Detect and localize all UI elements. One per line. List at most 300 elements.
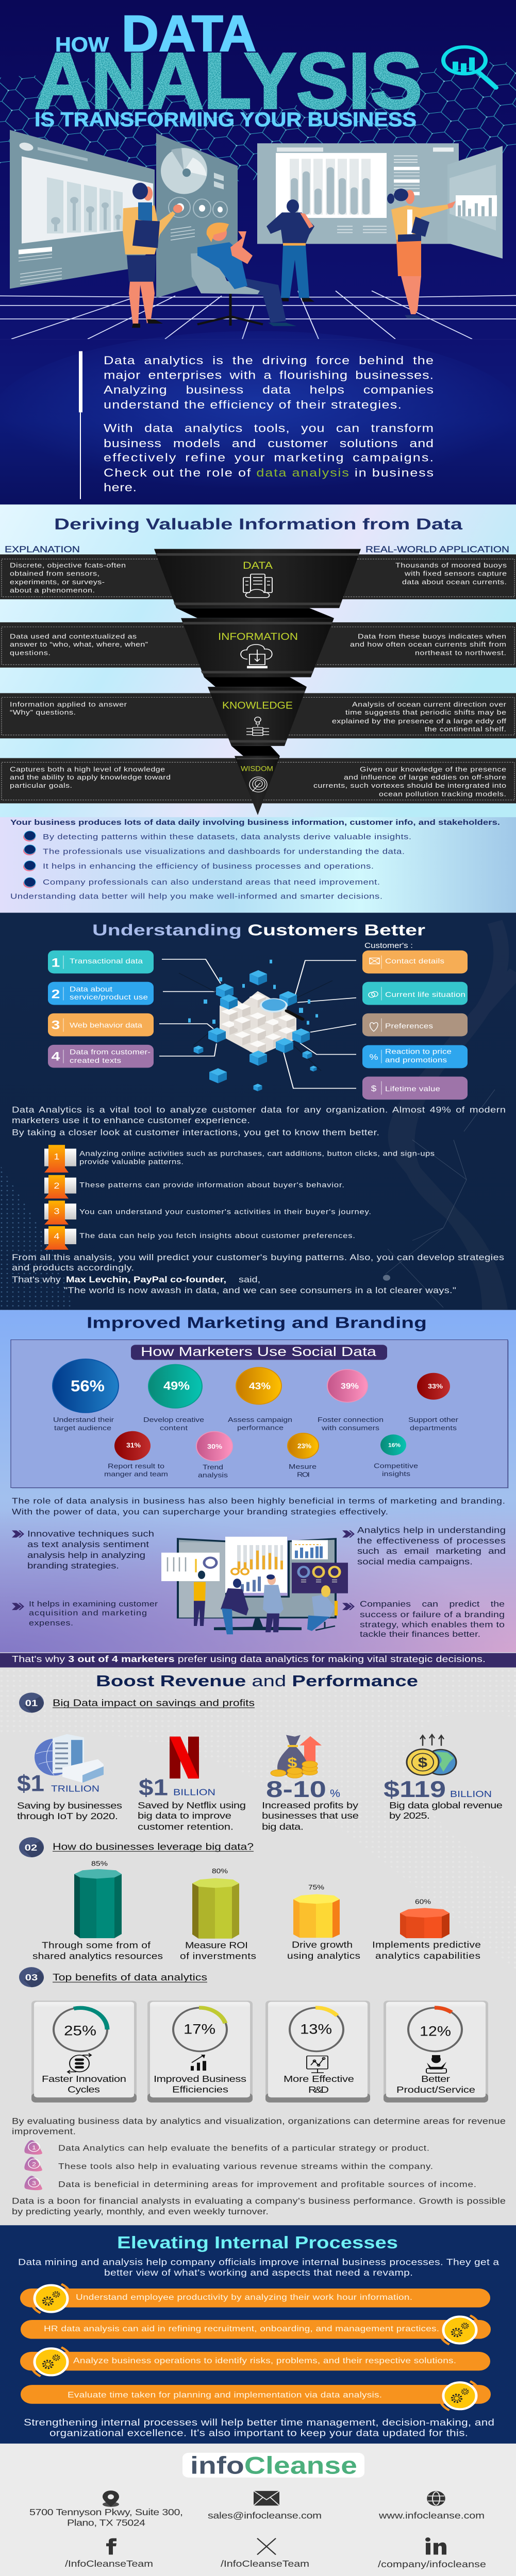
stat: 1 billion bbox=[138, 1774, 246, 1832]
band texts right: Analysis of ocean current direction over bbox=[352, 701, 506, 708]
circle labels row two: ROI bbox=[297, 1471, 310, 1479]
panel: boost revenue and performance bbox=[0, 1668, 516, 2225]
right customer pills: Lifetime value bbox=[385, 1086, 440, 1093]
bar 85 percent: 85% bbox=[91, 1860, 108, 1868]
paragraph two bbox=[104, 422, 434, 494]
band texts left: and the ability to apply knowledge toward bbox=[10, 774, 171, 782]
heading: Improved Marketing and Branding bbox=[87, 1314, 427, 1332]
icon: money bag with arrow and coins bbox=[271, 1735, 322, 1778]
column headings: EXPLANATION bbox=[5, 545, 80, 555]
band texts left: Captures both a high level of knowledge bbox=[10, 766, 165, 773]
icon: magnifier with bars bbox=[443, 47, 496, 88]
paragraph one: understand the efficiency of their strategies. bbox=[104, 399, 402, 411]
band texts left: particular goals. bbox=[10, 782, 72, 790]
illustration: team at dashboard monitor bbox=[161, 1537, 348, 1634]
circle labels row one: with consumers bbox=[321, 1425, 379, 1432]
bullet: companies predict bbox=[342, 1599, 505, 1639]
step texts: Analyzing online activities such as purchases, cart additions, button clicks, and sign-ups bbox=[79, 1150, 435, 1158]
band texts left: Data used and contextualized as bbox=[10, 633, 137, 640]
card: better product/service bbox=[384, 2001, 488, 2103]
process pill 1 bbox=[20, 2276, 490, 2321]
quote paragraph: and products accordingly. bbox=[12, 1263, 134, 1273]
left data pills: Transactional data bbox=[70, 957, 143, 965]
connector lines bbox=[159, 959, 356, 1088]
right customer pills bbox=[362, 951, 468, 1099]
band texts right: time suggests that periodic shifts may be bbox=[345, 709, 506, 716]
bullet: customer acquisition: expenses. bbox=[29, 1619, 73, 1628]
band texts right: and how often ocean currents shift from bbox=[350, 641, 506, 649]
accent bar bbox=[79, 351, 82, 499]
intro paragraph bbox=[18, 2258, 499, 2278]
bar 75 percent: 75% bbox=[308, 1884, 324, 1891]
handle: linkedin: /company/infocleanse bbox=[378, 2560, 486, 2569]
card: faster innovation cycles bbox=[31, 2001, 137, 2103]
quote paragraph: From all this analysis, you will predict your customer's buying patterns. Also, you can develop strategies bbox=[12, 1253, 504, 1262]
circle labels row two: Competitive bbox=[374, 1463, 418, 1470]
title: IS TRANSFORMING YOUR BUSINESS bbox=[35, 108, 417, 131]
band texts left: answer to “who, what, where, when” bbox=[10, 641, 148, 649]
circles row two: 16% bbox=[388, 1442, 401, 1448]
stat: 8-10 percent bbox=[262, 1776, 359, 1832]
bullet: innovative techniques: as text analysis sentiment bbox=[27, 1539, 149, 1549]
right customer pills: % bbox=[370, 1053, 378, 1062]
logo: infoCleanse bbox=[190, 2452, 357, 2479]
closing paragraph: organizational excellence. It's also important to keep your data updated for this. bbox=[49, 2428, 468, 2438]
icon: growth bars bbox=[191, 2055, 206, 2071]
bullet: customer acquisition: It helps in examining customer bbox=[29, 1600, 158, 1608]
quote paragraph: Max Levchin, PayPal co-founder, bbox=[66, 1275, 226, 1284]
icon: globe bbox=[428, 2492, 444, 2505]
stat: 119 billion: by 2025. bbox=[389, 1811, 430, 1821]
handle: x: /InfoCleanseTeam bbox=[221, 2559, 309, 2569]
intro paragraph: Data mining and analysis help company officials improve internal business processes. They get a bbox=[18, 2258, 499, 2267]
bar chart: leverage big data bbox=[74, 1860, 450, 1939]
step texts: The data can help you fetch insights about customer preferences. bbox=[79, 1232, 355, 1240]
icon: x bbox=[257, 2538, 276, 2555]
funnel labels: INFORMATION bbox=[218, 631, 298, 642]
person: standing man thinking bbox=[267, 199, 314, 302]
bar labels bbox=[32, 1940, 481, 1961]
closing paragraph: by predicting yearly, monthly, and even weekly turnover. bbox=[12, 2207, 269, 2216]
bullet: analytics help: social media campaigns. bbox=[357, 1556, 473, 1566]
left data pills: Web behavior data bbox=[70, 1022, 142, 1029]
card: faster innovation cycles: Cycles bbox=[68, 2084, 100, 2095]
closing paragraph bbox=[12, 2196, 506, 2216]
bullet list: By detecting patterns within these datasets, data analysts derive valuable insights. bbox=[43, 833, 411, 841]
paragraph two: business models and customer solutions and bbox=[104, 437, 434, 450]
stat: 8-10 percent: businesses that use bbox=[262, 1811, 359, 1821]
paragraph bbox=[12, 2116, 506, 2136]
panel: header hero bbox=[0, 0, 516, 339]
person: woman with folder bbox=[123, 183, 182, 328]
circles row one: 43% bbox=[249, 1381, 271, 1392]
intro paragraph: better view of what's working and aspects that need a revamp. bbox=[104, 2268, 413, 2278]
stat: 1 billion: Saved by Netflix using bbox=[138, 1801, 246, 1810]
bullet: companies predict: tackle their finances better. bbox=[360, 1630, 480, 1639]
paragraph: The role of data analysis in business has also been highly beneficial in terms of marketing and branding. bbox=[12, 1496, 505, 1505]
circle labels row one: content bbox=[160, 1425, 188, 1432]
closing line: Understanding data better will help you make well-informed and smarter decisions. bbox=[10, 892, 382, 901]
funnel labels: DATA bbox=[243, 560, 273, 571]
right customer pills: Reaction to price bbox=[385, 1048, 452, 1056]
band texts right: with fixed sensors capture bbox=[404, 570, 507, 578]
center-left dashboard panel bbox=[156, 133, 238, 298]
pink numbered list: Data Analytics can help evaluate the benefits of a particular strategy or product. bbox=[58, 2143, 429, 2153]
bar 85 percent bbox=[74, 1860, 122, 1938]
band texts left: questions. bbox=[10, 650, 51, 657]
card: more effective R&D: R&D bbox=[308, 2085, 329, 2095]
circle labels row one bbox=[53, 1416, 458, 1432]
stat: 1 trillion: through IoT by 2020. bbox=[17, 1811, 118, 1821]
stat: 8-10 percent: Increased profits by bbox=[262, 1801, 358, 1810]
numbered step icons: 3 bbox=[54, 1207, 60, 1216]
band texts right: and influence of large eddies on off-shore bbox=[344, 774, 506, 782]
closing paragraph: Data is a boon for financial analysts in evaluating a company's business performance. Growth is possible bbox=[12, 2196, 506, 2206]
person: woman pointing at chart bbox=[387, 189, 456, 318]
paragraph two: here. bbox=[104, 482, 137, 494]
left data pills: service/product use bbox=[70, 993, 148, 1002]
stat: 8-10 percent: 8-10 bbox=[266, 1776, 326, 1802]
stat: 8-10 percent: big data. bbox=[262, 1822, 304, 1832]
bullet: companies predict: success or failure of a branding bbox=[360, 1610, 505, 1619]
heading: Elevating Internal Processes bbox=[117, 2233, 398, 2252]
circles row one: 39% bbox=[341, 1381, 359, 1391]
circles row two: 31% bbox=[126, 1442, 141, 1449]
bar labels: Drive growth bbox=[292, 1940, 353, 1950]
paragraph bbox=[12, 1496, 505, 1516]
section badge 02: 02 bbox=[25, 1843, 37, 1853]
decorative background pattern bbox=[0, 1668, 516, 1970]
process pill 3 bbox=[20, 2339, 490, 2385]
panel: improved marketing and branding bbox=[0, 1310, 516, 1668]
left data pills: Data from customer- bbox=[70, 1048, 151, 1056]
bar labels: using analytics bbox=[287, 1952, 360, 1961]
step texts: These patterns can provide information about buyer's behavior. bbox=[79, 1181, 344, 1189]
stat: 119 billion: BILLION bbox=[450, 1789, 492, 1799]
card: better product/service: 12% bbox=[420, 2024, 451, 2039]
bullet list: The professionals use visualizations and dashboards for understanding the data. bbox=[43, 847, 405, 856]
quote paragraph: That's why bbox=[12, 1275, 61, 1284]
stat: 119 billion: $119 bbox=[384, 1776, 446, 1802]
card: improved business efficiencies: 17% bbox=[184, 2022, 215, 2037]
bar 60 percent: 60% bbox=[415, 1899, 431, 1906]
band texts right: ocean pollution tracking models. bbox=[379, 791, 506, 798]
circle labels row one: Assess campaign bbox=[228, 1416, 292, 1423]
paragraph two: With data analytics tools, you can transform bbox=[104, 422, 434, 435]
card: improved business efficiencies bbox=[147, 2001, 253, 2103]
column headings bbox=[5, 545, 509, 555]
paragraph: improvement. bbox=[12, 2127, 76, 2136]
summary lead: Your business produces lots of data daily involving business information, customer info, and stakeholders. bbox=[10, 818, 500, 826]
stat: 1 trillion: $1 bbox=[17, 1770, 44, 1796]
paragraph one bbox=[104, 354, 434, 411]
bullet: innovative techniques: analysis help in analyzing bbox=[27, 1550, 145, 1560]
process pill 2 bbox=[21, 2307, 491, 2353]
bullet: companies predict: Companies can predict the bbox=[360, 1599, 505, 1608]
bar labels: Through some from of bbox=[42, 1941, 151, 1951]
bullet: innovative techniques: branding strategies. bbox=[27, 1561, 119, 1570]
band texts right: Thousands of moored buoys bbox=[395, 562, 507, 569]
circles row one: 56% bbox=[71, 1378, 105, 1395]
band texts left: about a phenomenon. bbox=[10, 587, 95, 595]
numbered step icons bbox=[44, 1145, 76, 1250]
icon: location bbox=[103, 2490, 119, 2507]
paragraph: By taking a closer look at customer interactions, you get to know them better. bbox=[12, 1128, 379, 1137]
bullet list: Company professionals can also understand areas that need improvement. bbox=[43, 878, 380, 887]
icon: mail bbox=[254, 2491, 279, 2505]
left data pills: 2 bbox=[52, 987, 60, 1001]
step texts: You can understand your customer's activities in their buyer's journey. bbox=[79, 1208, 371, 1216]
step texts: provide valuable patterns. bbox=[79, 1158, 184, 1166]
circle labels row one: Foster connection bbox=[318, 1416, 384, 1423]
icon: building and globe bbox=[35, 1734, 104, 1783]
right customer pills: Current life situation bbox=[385, 991, 465, 999]
panel: understanding customers better bbox=[0, 913, 516, 1310]
section badge 01: 01 bbox=[25, 1698, 38, 1708]
bar labels: of inverstments bbox=[180, 1952, 256, 1961]
customer label: Customer's : bbox=[364, 941, 413, 950]
icon: coin, globe and arrows bbox=[407, 1735, 456, 1775]
subheading 02: How do businesses leverage big data? bbox=[53, 1841, 254, 1852]
pill heading: How Marketers Use Social Data bbox=[141, 1344, 376, 1359]
card: better product/service: Better bbox=[421, 2074, 450, 2084]
far right dashboard panel bbox=[447, 146, 503, 259]
bullet: innovative techniques bbox=[12, 1529, 154, 1570]
band texts right bbox=[313, 562, 507, 798]
circles row one bbox=[53, 1359, 450, 1413]
bullet list: It helps in enhancing the efficiency of business processes and operations. bbox=[43, 862, 374, 871]
process pill 2: HR data analysis can aid in refining recruitment, onboarding, and management practices. bbox=[44, 2324, 439, 2333]
band texts right: currents, such vortexes should be intergrated into bbox=[313, 782, 506, 790]
panel: social data bbox=[11, 1340, 509, 1488]
panel: deriving valuable information bbox=[0, 504, 516, 913]
bullet: customer acquisition: acquisition and marketing bbox=[29, 1609, 147, 1617]
process pill 4: Evaluate time taken for planning and implementation via data analysis. bbox=[68, 2390, 382, 2399]
card: faster innovation cycles: 25% bbox=[64, 2024, 96, 2039]
band texts left: Information applied to answer bbox=[10, 701, 127, 708]
circles row two: 30% bbox=[207, 1443, 222, 1451]
left data pills: 1 bbox=[52, 955, 60, 970]
icon: money bag with arrow and coins: $ bbox=[288, 1755, 297, 1771]
heading: Deriving Valuable Information from Data bbox=[54, 516, 463, 533]
bar 60 percent bbox=[400, 1899, 450, 1938]
left data pills: created texts bbox=[70, 1057, 121, 1064]
email: sales@infocleanse.com bbox=[208, 2511, 322, 2521]
band texts left bbox=[10, 562, 171, 790]
quote paragraph bbox=[12, 1253, 504, 1295]
bar labels: analytics capabilities bbox=[375, 1952, 480, 1961]
band texts right: data about ocean currents. bbox=[402, 579, 507, 586]
icon: service person bbox=[426, 2055, 446, 2073]
circles row two: 23% bbox=[297, 1443, 311, 1450]
icon: coin, globe and arrows: $ bbox=[418, 1755, 427, 1770]
right customer pills: $ bbox=[371, 1084, 377, 1093]
band texts right: northeast to northwest. bbox=[415, 650, 506, 657]
section badge 02 bbox=[19, 1837, 44, 1857]
pink numbered list: 3 bbox=[32, 2179, 36, 2187]
bullet: companies predict: strategy, which enables them to bbox=[360, 1620, 505, 1629]
floor grid bbox=[0, 291, 516, 339]
subheading 03: Top benefits of data analytics bbox=[53, 1972, 207, 1983]
icon: information cloud and laptop bbox=[241, 645, 272, 668]
icon: linkedin bbox=[425, 2537, 446, 2555]
panel: intro text bbox=[0, 331, 516, 507]
bullet: analytics help bbox=[342, 1525, 506, 1566]
band texts right: Data from these buoys indicates when bbox=[358, 633, 506, 640]
address: Plano, TX 75024 bbox=[67, 2518, 145, 2528]
card: improved business efficiencies: Improved Business bbox=[154, 2074, 246, 2084]
section badge 03: 03 bbox=[25, 1973, 38, 1983]
card: improved business efficiencies: Efficiencies bbox=[172, 2084, 228, 2095]
band texts right: the continental shelf. bbox=[425, 726, 506, 733]
stat: 119 billion bbox=[384, 1776, 503, 1821]
circle labels row two: analysis bbox=[198, 1472, 228, 1479]
website: www.infocleanse.com bbox=[378, 2511, 485, 2521]
quote paragraph: "The world is now awash in data, and we can see consumers in a lot clearer ways." bbox=[64, 1286, 456, 1295]
bullet: customer acquisition bbox=[12, 1600, 158, 1628]
bullet: analytics help: Analytics help in understanding bbox=[357, 1525, 506, 1535]
stat: 1 billion: $1 bbox=[139, 1774, 168, 1800]
paragraph one: Analyzing business data helps companies bbox=[104, 384, 434, 396]
paragraph one: Data analytics is the driving force behind the bbox=[104, 354, 434, 367]
card: more effective R&D: More Effective bbox=[284, 2074, 354, 2084]
bullet: analytics help: such as email marketing and bbox=[357, 1546, 506, 1556]
icon: netflix N bbox=[170, 1737, 199, 1778]
funnel labels bbox=[218, 560, 298, 773]
numbered step icons: 1 bbox=[54, 1152, 60, 1161]
icon: chart monitor bbox=[307, 2056, 328, 2073]
stat: 1 billion: BILLION bbox=[173, 1787, 215, 1798]
band texts left: experiments, or surveys- bbox=[10, 579, 105, 586]
right customer pills: Preferences bbox=[385, 1022, 433, 1030]
left data pills: 3 bbox=[52, 1018, 60, 1032]
quote paragraph: said, bbox=[239, 1275, 260, 1284]
bar 75 percent bbox=[293, 1884, 340, 1938]
paragraph two: Check out the role of data analysis in business bbox=[104, 467, 434, 479]
pink numbered list bbox=[24, 2140, 476, 2190]
circle labels row one: Understand their bbox=[53, 1416, 114, 1423]
paragraph bbox=[12, 1105, 506, 1137]
pink numbered list: These tools also help in evaluating various revenue streams within the company. bbox=[58, 2162, 433, 2171]
circle labels row two: Report result to bbox=[108, 1463, 164, 1470]
stat: 1 billion: customer retention. bbox=[138, 1822, 234, 1832]
stat: 8-10 percent: % bbox=[330, 1788, 340, 1800]
band texts left: Discrete, objective fcats-often bbox=[10, 562, 126, 569]
title: HOW bbox=[55, 33, 109, 56]
central data cube bbox=[179, 960, 332, 1091]
stat: 119 billion: Big data global revenue bbox=[389, 1801, 503, 1810]
banner: 3 out of 4 marketers: That's why 3 out of 4 marketers prefer using data analytics for making vital strategic decisions. bbox=[12, 1654, 486, 1664]
band texts right: explained by the presence of a large eddy off bbox=[332, 718, 507, 725]
funnel bbox=[154, 549, 361, 815]
paragraph one: major enterprises with a flourishing businesses. bbox=[104, 369, 434, 382]
circles row two bbox=[114, 1431, 406, 1461]
bar 80 percent: 80% bbox=[212, 1868, 228, 1875]
pink numbered list: 2 bbox=[32, 2161, 36, 2167]
heading: Understanding Customers Better bbox=[92, 922, 425, 939]
person: seated man on chair bbox=[191, 223, 296, 326]
panel: elevating internal processes bbox=[0, 2225, 516, 2444]
title: ANALYSIS bbox=[35, 37, 422, 125]
dark bands bbox=[0, 554, 516, 803]
paragraph: Data Analytics is a vital tool to analyze customer data for any organization. Almost 49% of modern bbox=[12, 1105, 506, 1114]
bullet: analytics help: the effectiveness of processes bbox=[357, 1536, 506, 1545]
circles row one: 33% bbox=[428, 1383, 443, 1390]
bar labels: Measure ROI bbox=[185, 1941, 248, 1951]
circle labels row two: Trend bbox=[203, 1464, 223, 1471]
circle labels row two: Mesure bbox=[289, 1463, 317, 1471]
bullet: innovative techniques: Innovative techniques such bbox=[27, 1529, 154, 1538]
circle labels row one: performance bbox=[237, 1425, 284, 1432]
circle labels row one: Develop creative bbox=[143, 1416, 204, 1423]
band texts left: obtained from sensors, bbox=[10, 570, 99, 578]
paragraph: marketers use it to enhance customer experience. bbox=[12, 1116, 250, 1125]
stat: 1 trillion: TRILLION bbox=[51, 1784, 99, 1794]
left data pills: 4 bbox=[52, 1049, 60, 1063]
step texts bbox=[79, 1150, 435, 1240]
numbered step icons: 4 bbox=[54, 1232, 60, 1241]
bullet list bbox=[23, 831, 411, 888]
handle: facebook: /InfoCleanseTeam bbox=[65, 2559, 153, 2569]
closing paragraph bbox=[24, 2417, 494, 2438]
icon: knowledge bulb and server bbox=[246, 717, 269, 736]
pink numbered list: 1 bbox=[32, 2144, 36, 2151]
left data pills: Data about bbox=[70, 986, 113, 993]
stat: 1 billion: big data to improve bbox=[138, 1811, 231, 1821]
band texts right: Given our knowledge of the presence bbox=[360, 766, 506, 773]
circle labels row two: manger and team bbox=[104, 1471, 168, 1478]
banner: 3 out of 4 marketers bbox=[0, 1652, 516, 1668]
bar labels: Implements predictive bbox=[372, 1940, 481, 1950]
section badge 01 bbox=[19, 1692, 44, 1713]
address bbox=[29, 2507, 183, 2528]
title bbox=[35, 6, 422, 131]
bar 80 percent bbox=[192, 1868, 239, 1939]
right customer pills: Contact details bbox=[385, 957, 444, 965]
icon: data building and cloud bbox=[243, 574, 272, 598]
bar labels: shared analytics resources bbox=[32, 1952, 163, 1961]
process pill 1: Understand employee productivity by analyzing their work hour information. bbox=[76, 2293, 412, 2302]
paragraph: With the power of data, you can supercharge your branding strategies effectively. bbox=[12, 1507, 388, 1516]
paragraph: By evaluating business data by analytics and visualization, organizations can determine areas for revenue bbox=[12, 2116, 506, 2126]
column headings: REAL-WORLD APPLICATION bbox=[365, 545, 509, 555]
heading: Boost Revenue and Performance bbox=[96, 1672, 418, 1690]
address: 5700 Tennyson Pkwy, Suite 300, bbox=[29, 2507, 183, 2518]
funnel labels: KNOWLEDGE bbox=[222, 700, 293, 711]
decorative waves and dots bbox=[0, 922, 516, 1310]
left dashboard screen bbox=[10, 130, 155, 289]
stat: 1 trillion: Saving by businesses bbox=[17, 1801, 122, 1811]
panel: footer bbox=[0, 2444, 516, 2576]
icon: database cycle bbox=[68, 2054, 91, 2074]
right dashboard screen bbox=[257, 143, 459, 244]
section badge 03 bbox=[19, 1967, 44, 1987]
subheading 01: Big Data impact on savings and profits bbox=[53, 1698, 255, 1708]
closing paragraph: Strengthening internal processes will help better time management, decision-making, and bbox=[24, 2417, 494, 2428]
left data pills bbox=[48, 951, 154, 1068]
circle labels row one: target audience bbox=[54, 1425, 111, 1432]
pink numbered list: Data is beneficial in determining areas for improvement and profitable sources of income. bbox=[58, 2180, 476, 2189]
circle labels row two: insights bbox=[382, 1470, 410, 1478]
process pill 3: Analyze business operations to identify risks, problems, and their respective solutions. bbox=[73, 2356, 456, 2365]
circles row one: 49% bbox=[163, 1380, 190, 1393]
card: more effective R&D bbox=[265, 2001, 370, 2103]
stat: 1 trillion bbox=[17, 1770, 122, 1821]
icon: facebook bbox=[106, 2538, 116, 2555]
network mesh wave background bbox=[0, 62, 516, 181]
paragraph two: effectively refine your marketing campaigns. bbox=[104, 452, 434, 464]
card: faster innovation cycles: Faster Innovation bbox=[42, 2074, 126, 2084]
